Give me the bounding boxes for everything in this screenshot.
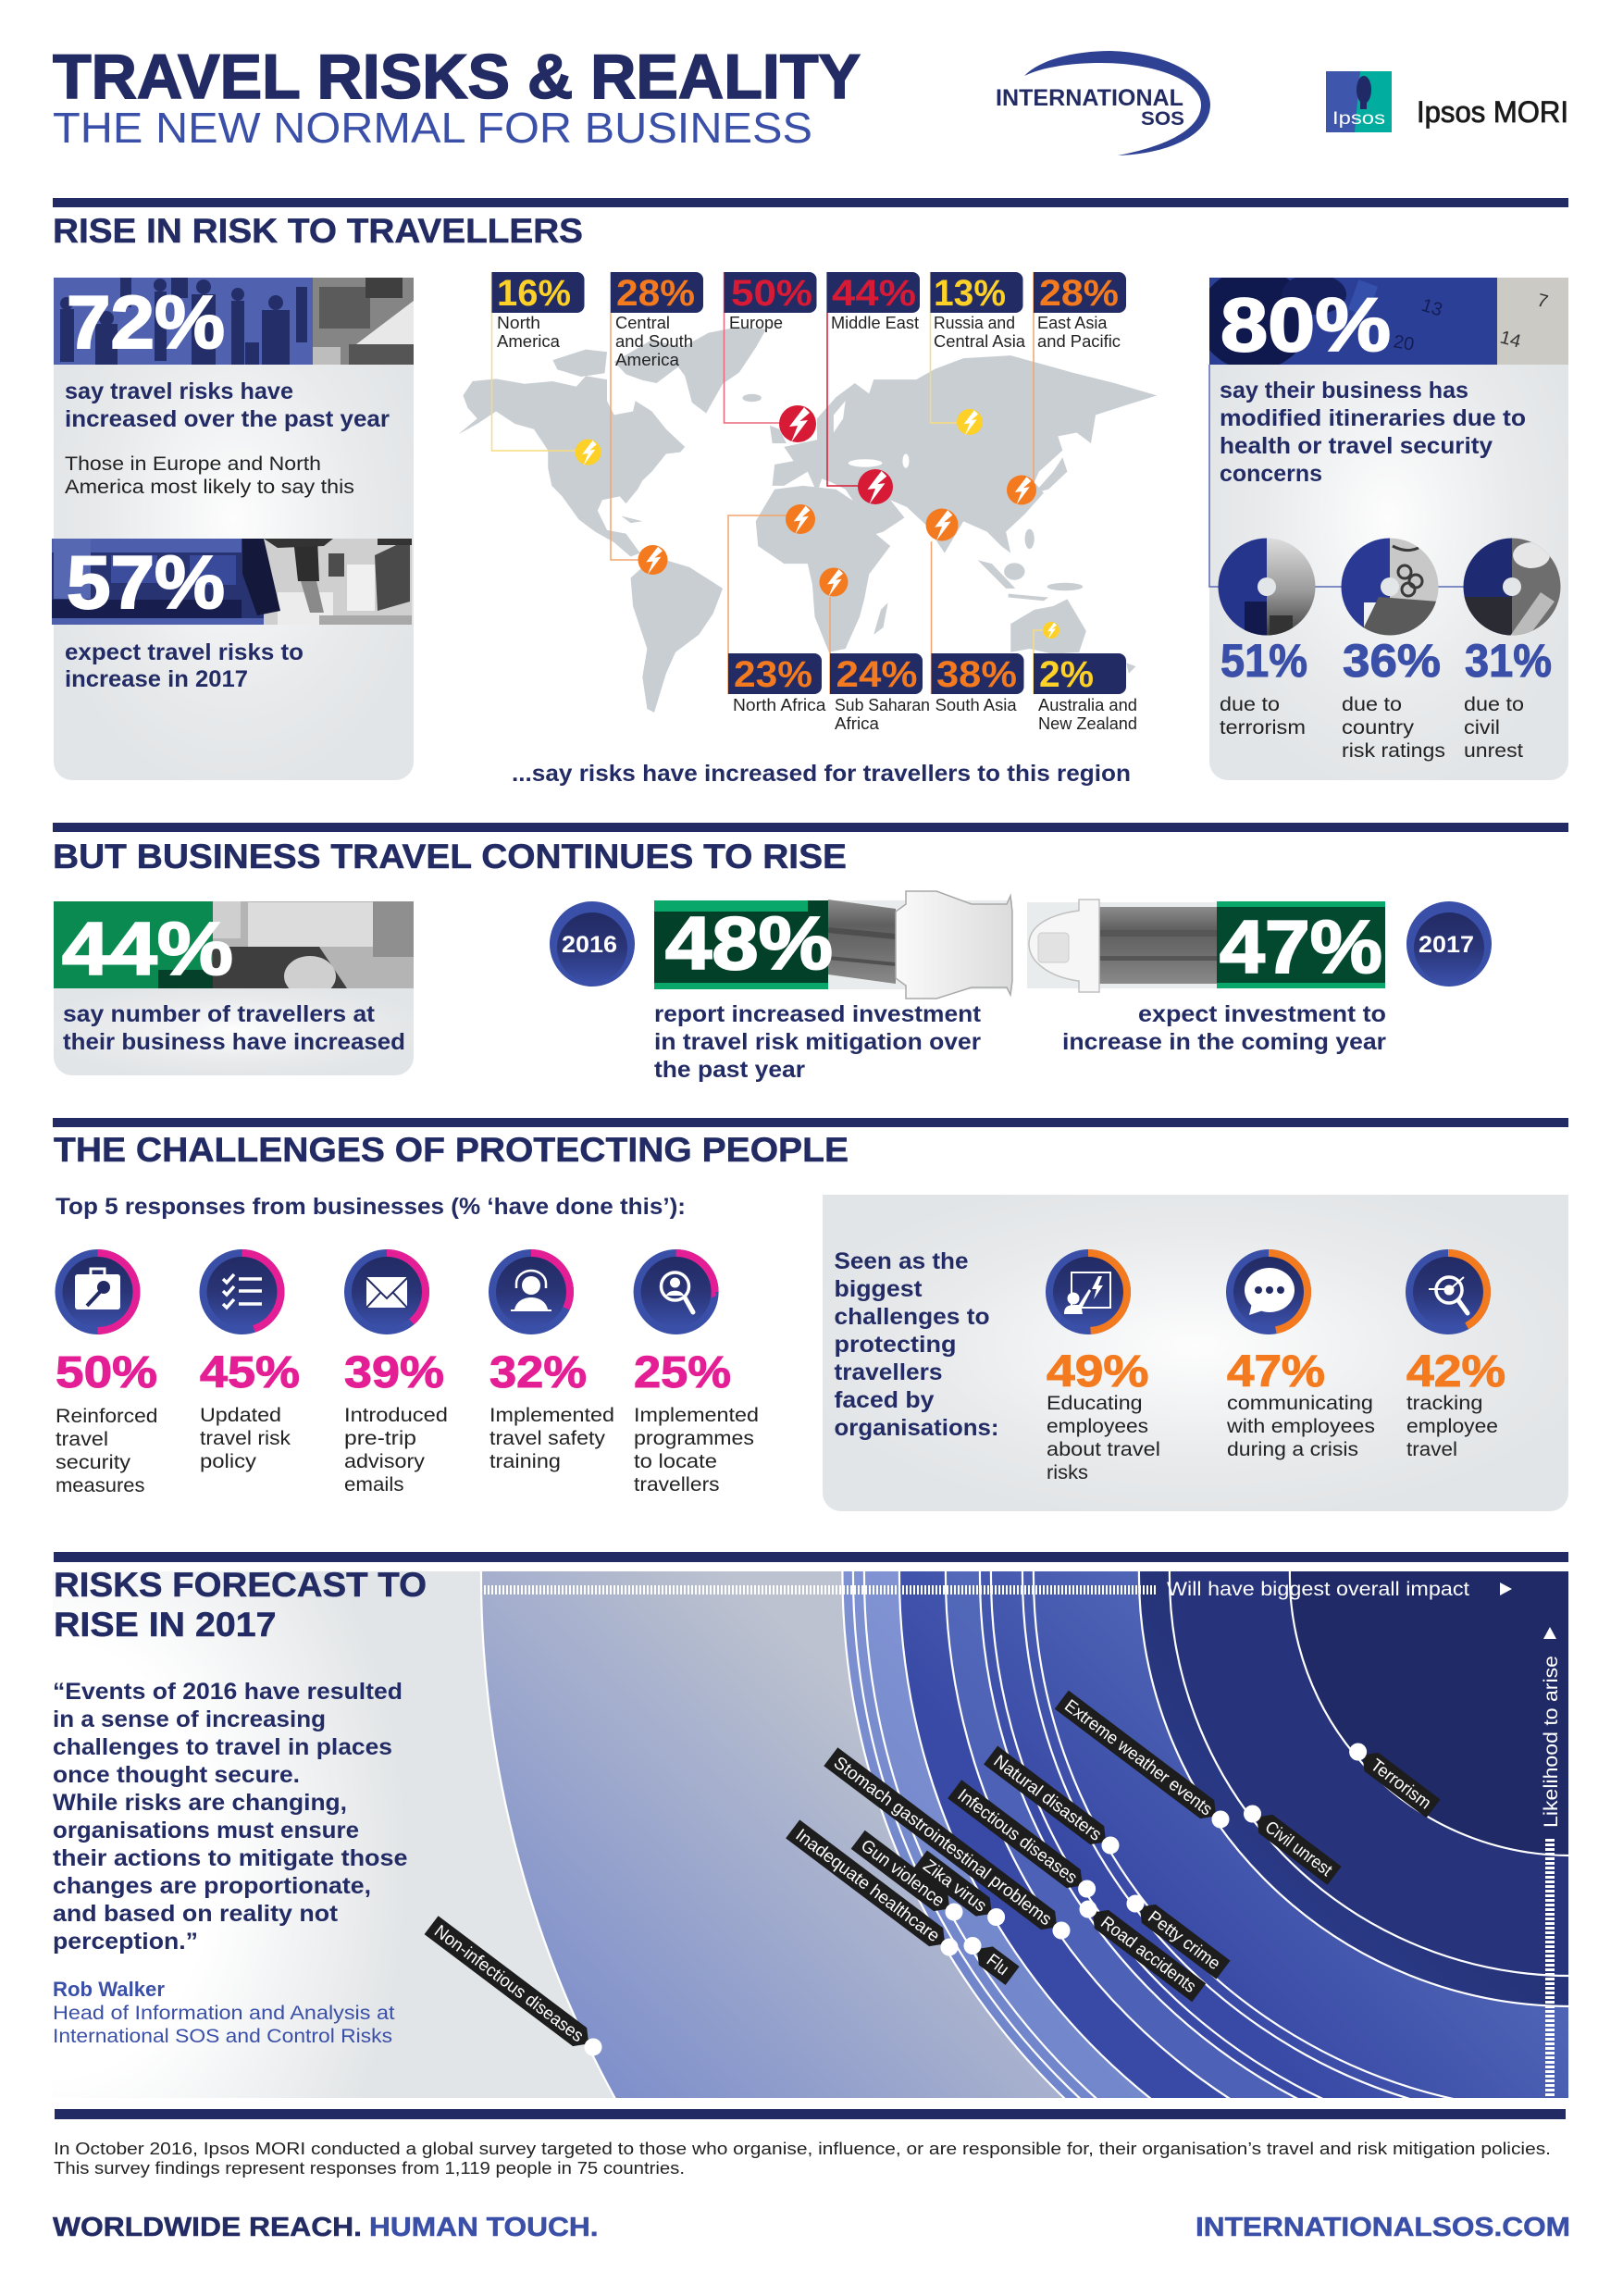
stat: 51%: 51%	[1220, 635, 1307, 687]
response: reinforced security: travel	[56, 1429, 108, 1450]
quote: in a sense of increasing	[53, 1706, 326, 1732]
tag: Natural disasters	[984, 1746, 1124, 1860]
labels: due to: terrorism	[1220, 717, 1306, 738]
labels: due to: due to	[1220, 694, 1280, 715]
photo: calendar 80%: 14	[1498, 328, 1523, 353]
challenge: tracking travel: tracking	[1406, 1393, 1482, 1414]
section bar	[53, 198, 1568, 207]
footer note: This survey findings represent responses from 1,119 people in 75 countries.	[54, 2159, 685, 2178]
quote: organisations must ensure	[53, 1818, 359, 1843]
attribution: Rob Walker	[53, 1978, 165, 2001]
tag: Flu	[959, 1931, 1020, 1985]
text: modified itineraries	[1220, 378, 1526, 487]
response: reinforced security: 50%	[56, 1348, 157, 1397]
callout: North America	[492, 272, 585, 351]
heading: challenges: THE CHALLENGES OF PROTECTING PEOPLE	[54, 1131, 849, 1169]
text: seen as the biggest challenges: organisations:	[835, 1415, 999, 1441]
response: locating travellers: to locate	[634, 1451, 717, 1472]
heading: risks forecast: RISKS FORECAST TO	[54, 1566, 427, 1604]
challenge: communicating: during a crisis	[1227, 1439, 1358, 1460]
challenge: tracking travel: employee	[1406, 1416, 1498, 1437]
tag: Flu: Flu	[983, 1951, 1012, 1980]
logo: International SOS: SOS	[1141, 108, 1184, 130]
tag: Zika virus: Zika virus	[919, 1856, 990, 1917]
tag: Extreme weather events: Extreme weather events	[1060, 1696, 1216, 1819]
response: pre-trip emails: 39%	[344, 1348, 444, 1397]
text: modified itineraries: concerns	[1220, 461, 1322, 487]
text: seen as the biggest challenges: protecting	[835, 1332, 957, 1358]
response: pre-trip emails: advisory	[344, 1451, 426, 1472]
footer note: In October 2016, Ipsos MORI conducted a global survey targeted to those who organise, influence, or are responsible for, their organisation’s travel and risk mitigation policies.	[54, 2140, 1551, 2158]
quote: challenges to travel in places	[53, 1734, 392, 1760]
section bar	[53, 823, 1568, 832]
badge: 2017: 2017	[1419, 932, 1474, 958]
callout: Russia and Central Asia: 13%	[934, 273, 1006, 314]
panel: risk forecast	[53, 1566, 1573, 2101]
text: seen as the biggest challenges: travellers	[835, 1359, 942, 1385]
callout: Sub Saharan Africa: Sub Saharan	[835, 696, 930, 714]
marker: North Africa	[786, 504, 815, 534]
badge: 2016: 2016	[562, 932, 617, 958]
response: safety training: Implemented	[489, 1405, 614, 1426]
axis label: impact: Will have biggest overall impact	[1167, 1579, 1469, 1600]
text: increased investment: in travel risk mitigation over	[654, 1029, 981, 1055]
icon: envelope	[344, 1249, 429, 1334]
labels: due to: due to	[1342, 694, 1402, 715]
icon: checklist	[200, 1249, 285, 1334]
response: safety training: 32%	[489, 1348, 587, 1397]
callout: East Asia and Pacific: and Pacific	[1037, 332, 1121, 351]
callout: North America: America	[497, 332, 561, 351]
callout: Sub Saharan Africa: 24%	[836, 654, 918, 695]
stat: 31%: 31%	[1465, 635, 1552, 687]
callout: Middle East: 44%	[832, 273, 916, 314]
response: safety training	[489, 1249, 614, 1472]
stat: 36%: 36%	[1343, 635, 1441, 687]
challenge: tracking travel	[1406, 1249, 1505, 1460]
callout: Central and South America	[611, 272, 703, 369]
callout: Sub Saharan Africa	[830, 653, 930, 733]
callout: Russia and Central Asia	[931, 272, 1026, 351]
axis label: likelihood: Likelihood to arise	[1541, 1656, 1562, 1828]
logo: Ipsos MORI: Ipsos MORI	[1417, 95, 1568, 129]
text: number of travellers: their business have increased	[63, 1029, 405, 1055]
callout: Russia and Central Asia: Central Asia	[934, 332, 1026, 351]
challenge: educating employees: about travel	[1047, 1439, 1160, 1460]
response: locating travellers: Implemented	[634, 1405, 759, 1426]
response: updated policy: 45%	[200, 1348, 300, 1397]
callout: Sub Saharan Africa: Africa	[835, 714, 880, 733]
callout: Australia and New Zealand: New Zealand	[1038, 714, 1137, 733]
text: seen as the biggest challenges: faced by	[835, 1387, 935, 1413]
callout: Russia and Central Asia: Russia and	[934, 314, 1015, 332]
stat: 57%: 57%	[67, 541, 225, 625]
quote: changes are proportionate,	[53, 1873, 371, 1899]
text: number of travellers	[63, 1001, 405, 1055]
challenge: communicating	[1226, 1249, 1375, 1460]
callout: Middle East: Middle East	[831, 314, 919, 332]
section bar	[53, 1118, 1568, 1127]
callout: Central and South America: and South	[615, 332, 693, 351]
stat box: 47%: 47%	[1220, 906, 1382, 989]
callout: East Asia and Pacific: 28%	[1039, 273, 1119, 314]
response: updated policy	[200, 1249, 300, 1472]
icon: target magnifier	[1406, 1249, 1491, 1334]
challenge: tracking travel: 42%	[1406, 1347, 1505, 1396]
response: locating travellers: programmes	[634, 1428, 754, 1449]
text: seen as the biggest challenges	[835, 1248, 999, 1441]
response: updated policy: travel risk	[200, 1428, 291, 1449]
badge: 2016	[550, 901, 635, 987]
labels: due to: unrest	[1464, 740, 1523, 762]
quote: While risks are changing,	[53, 1790, 347, 1816]
marker: Central and South America	[638, 545, 668, 575]
quote: their actions to mitigate those	[53, 1845, 408, 1871]
stat: 44%: 44%	[62, 908, 233, 991]
response: pre-trip emails: pre-trip	[344, 1428, 416, 1449]
heading: risks forecast	[54, 1566, 427, 1644]
response: locating travellers	[634, 1249, 759, 1496]
callout: South Asia	[931, 653, 1023, 714]
tag: Stomach gastrointestinal problems: Stomach gastrointestinal problems	[830, 1753, 1055, 1930]
tag: Terrorism: Terrorism	[1367, 1756, 1434, 1814]
photo disc: country risk	[1341, 538, 1443, 639]
callout: North America: North	[497, 314, 540, 332]
icon: teacher board	[1046, 1249, 1131, 1334]
response: reinforced security	[56, 1249, 157, 1496]
labels: due to: due to	[1464, 694, 1524, 715]
photo: calendar 80%: 20	[1392, 331, 1416, 355]
quote	[53, 1679, 408, 1955]
challenge: educating employees: risks	[1047, 1462, 1088, 1483]
callout: East Asia and Pacific	[1034, 272, 1126, 351]
logo: International SOS: INTERNATIONAL	[996, 85, 1183, 111]
subtitle: THE NEW NORMAL FOR BUSINESS	[53, 104, 812, 152]
footer note	[54, 2140, 1551, 2178]
text: say travel risks: say travel risks have	[65, 379, 293, 404]
panel: left stats	[52, 278, 414, 780]
challenge: communicating: 47%	[1227, 1347, 1325, 1396]
heading: rise in risk: RISE IN RISK TO TRAVELLERS	[53, 212, 583, 250]
callout: South Asia: South Asia	[935, 696, 1018, 714]
marker: North America	[576, 440, 601, 465]
callout: Europe: 50%	[731, 273, 812, 314]
marker: Russia	[957, 409, 983, 435]
tag: Zika virus	[913, 1851, 1010, 1931]
labels: due to	[1220, 694, 1524, 762]
section bar	[54, 1552, 1568, 1562]
callout: Australia and New Zealand: Australia and	[1038, 696, 1137, 714]
text: number of travellers: say number of travellers at	[63, 1001, 376, 1027]
title: TRAVEL RISKS & REALITY	[53, 42, 861, 112]
text: seen as the biggest challenges: Seen as the	[835, 1248, 969, 1274]
response: updated policy: policy	[200, 1451, 257, 1472]
challenge: educating employees: 49%	[1047, 1347, 1149, 1396]
callout: Australia and New Zealand	[1034, 653, 1137, 733]
text: seen as the biggest challenges: biggest	[835, 1276, 923, 1302]
chart: risk rings	[481, 1568, 1573, 2101]
logo: International SOS	[996, 51, 1210, 155]
callout: Central and South America: America	[615, 351, 680, 369]
tag: Civil unrest: Civil unrest	[1261, 1818, 1336, 1880]
challenge: educating employees: Educating	[1047, 1393, 1143, 1414]
icon: briefcase key	[56, 1249, 141, 1334]
response: safety training: travel safety	[489, 1428, 606, 1449]
footer url: INTERNATIONALSOS.COM	[1196, 2213, 1570, 2242]
text: increased investment	[654, 1001, 982, 1083]
callout: Europe	[724, 272, 816, 332]
response: reinforced security: measures	[56, 1475, 144, 1496]
seatbelt: buckle left	[828, 891, 1012, 999]
callout: North Africa: North Africa	[733, 696, 827, 714]
response: reinforced security: security	[56, 1452, 131, 1473]
response: safety training: training	[489, 1451, 561, 1472]
callout: Middle East	[827, 272, 920, 332]
subheading: top 5 responses: Top 5 responses from businesses (% ‘have done this’):	[56, 1194, 686, 1220]
text: seen as the biggest challenges: challenges to	[835, 1304, 990, 1330]
panel: world map	[458, 272, 1157, 787]
marker: South Asia	[925, 509, 959, 540]
tag: Gun violence: Gun violence	[857, 1836, 948, 1911]
tag: Road accidents: Road accidents	[1096, 1913, 1199, 1997]
callout: Europe: Europe	[729, 314, 783, 332]
text: expect investment: increase in the coming year	[1062, 1029, 1386, 1055]
photo: calendar 80%: 13	[1419, 295, 1444, 321]
quote: perception.”	[53, 1929, 198, 1955]
text: expect travel risks: increase in 2017	[65, 666, 248, 692]
photo: calendar 80%: 7	[1535, 291, 1550, 313]
photo: tightrope 57%	[52, 539, 412, 625]
callout: North America: 16%	[497, 273, 571, 314]
callout: East Asia and Pacific: East Asia	[1037, 314, 1108, 332]
photo disc: civil unrest	[1463, 538, 1561, 639]
text: modified itineraries: modified itineraries due to	[1220, 405, 1526, 431]
stat: 80%: 80%	[1220, 283, 1391, 367]
response: updated policy: Updated	[200, 1405, 281, 1426]
text: increased investment: report increased investment	[654, 1001, 982, 1027]
seatbelt: tongue right	[1027, 900, 1217, 992]
logo: Ipsos MORI: Ipsos	[1332, 109, 1385, 129]
labels: due to: country	[1342, 717, 1415, 738]
callout: North Africa: 23%	[734, 654, 812, 695]
footer tagline: HUMAN TOUCH.	[369, 2213, 598, 2242]
response: pre-trip emails: Introduced	[344, 1405, 448, 1426]
callout: South Asia: 38%	[936, 654, 1017, 695]
map caption: ...say risks have increased for travellers to this region	[512, 761, 1131, 787]
tag: Inadequate healthcare: Inadequate healthcare	[792, 1826, 943, 1946]
marker: Europe	[779, 405, 816, 442]
attribution: International SOS and Control Risks	[53, 2025, 392, 2047]
challenge: communicating: with employees	[1226, 1416, 1375, 1437]
response: locating travellers: travellers	[634, 1474, 720, 1496]
photo: calendar 80%	[1209, 278, 1568, 365]
text: say travel risks	[65, 379, 390, 432]
section bar	[55, 2109, 1566, 2119]
callout: Australia and New Zealand: 2%	[1039, 654, 1094, 695]
text: Europe and North America	[65, 453, 354, 498]
challenge: communicating: communicating	[1227, 1393, 1373, 1414]
leader lines	[492, 272, 1044, 694]
challenge: tracking travel: travel	[1406, 1439, 1457, 1460]
icon: magnifier person	[634, 1249, 719, 1334]
text: expect travel risks: expect travel risks to	[65, 639, 304, 665]
icon: speech bubble	[1226, 1249, 1311, 1334]
response: reinforced security: Reinforced	[56, 1406, 157, 1427]
heading: business travel: BUT BUSINESS TRAVEL CONTINUES TO RISE	[53, 838, 847, 875]
response: pre-trip emails	[344, 1249, 448, 1496]
text: say travel risks: increased over the past year	[65, 406, 390, 432]
photo: laptop	[54, 901, 414, 997]
text: Europe and North America: America most likely to say this	[65, 477, 354, 498]
map: landmasses	[458, 327, 1157, 713]
tag: Terrorism	[1344, 1737, 1441, 1818]
text: expect investment: expect investment to	[1138, 1001, 1386, 1027]
labels: due to: civil	[1464, 717, 1500, 738]
attribution: Head of Information and Analysis at	[53, 2002, 395, 2024]
quote: once thought secure.	[53, 1762, 300, 1788]
response: pre-trip emails: emails	[344, 1474, 403, 1496]
response: locating travellers: 25%	[634, 1348, 731, 1397]
panel: 44% travellers	[54, 901, 414, 1075]
callout: Central and South America: 28%	[616, 273, 695, 314]
photo disc: terrorism	[1218, 538, 1316, 639]
tag: Natural disasters: Natural disasters	[990, 1752, 1105, 1845]
challenge: educating employees: employees	[1047, 1416, 1148, 1437]
challenge: educating employees	[1046, 1249, 1160, 1483]
quote: and based on reality not	[53, 1901, 339, 1927]
marker: Australia	[1043, 622, 1059, 639]
text: expect investment	[1062, 1001, 1386, 1055]
stat box: 48%: 48%	[665, 902, 833, 986]
panel: biggest challenges	[823, 1195, 1568, 1511]
tag: Non-infectious diseases: Non-infectious diseases	[430, 1921, 587, 2046]
callout: Central and South America: Central	[615, 314, 670, 332]
callout: North Africa	[728, 653, 827, 714]
marker: Middle East	[858, 469, 893, 504]
quote: “Events of 2016 have resulted	[53, 1679, 403, 1705]
stat: 72%: 72%	[67, 281, 225, 365]
photo: crowd 72%	[54, 278, 414, 365]
tag: Petty crime	[1121, 1889, 1231, 1980]
footer tagline	[53, 2213, 598, 2242]
marker: Sub Saharan Africa	[820, 568, 848, 596]
text: increased investment: the past year	[654, 1057, 805, 1083]
text: modified itineraries: say their business has	[1220, 378, 1468, 403]
panel: itineraries	[1198, 268, 1568, 780]
text: expect travel risks	[65, 639, 304, 692]
tag: Civil unrest	[1238, 1799, 1342, 1885]
logo: Ipsos MORI	[1326, 71, 1568, 132]
footer tagline: WORLDWIDE REACH.	[53, 2213, 362, 2242]
tag: Gun violence	[851, 1831, 968, 1927]
icon: headset person	[489, 1249, 574, 1334]
tag: Petty crime: Petty crime	[1144, 1907, 1223, 1974]
badge: 2017	[1406, 901, 1492, 987]
ruler ticks	[484, 1585, 1156, 1595]
text: Europe and North America: Those in Europe and North	[65, 453, 321, 475]
tag: Infectious diseases: Infectious diseases	[954, 1786, 1081, 1888]
attribution	[53, 1978, 395, 2047]
labels: due to: risk ratings	[1342, 740, 1445, 762]
text: modified itineraries: health or travel security	[1220, 433, 1493, 459]
heading: risks forecast: RISE IN 2017	[54, 1606, 276, 1644]
tag: Road accidents	[1074, 1894, 1206, 2002]
marker: East Asia	[1007, 476, 1036, 505]
